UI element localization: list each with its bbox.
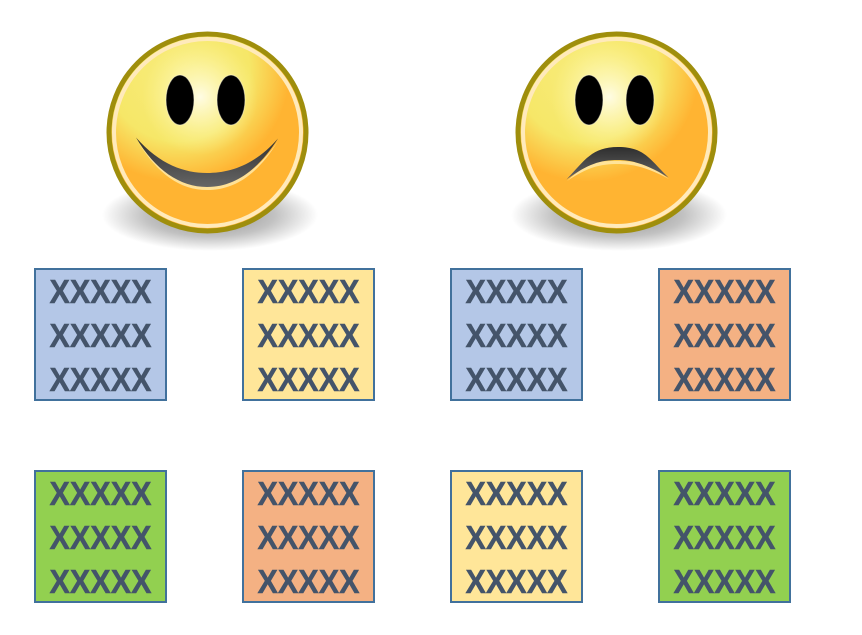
- smile highlight: [138, 141, 278, 190]
- box: row 1 column 1 blue: XXXXX: [50, 361, 152, 398]
- box: row 1 column 1 blue: XXXXX: [50, 273, 152, 310]
- face glow: [142, 39, 258, 155]
- box: row 1 column 4 orange: XXXXX: [674, 273, 776, 310]
- box: row 1 column 3 blue: [451, 269, 582, 400]
- right eye: [217, 75, 245, 125]
- right eye: [626, 75, 654, 125]
- box: row 2 column 4 green: XXXXX: [674, 563, 776, 600]
- left eye: [166, 75, 194, 125]
- box: row 2 column 2 orange: [243, 471, 374, 602]
- box: row 2 column 1 green: [35, 471, 166, 602]
- box: row 2 column 2 orange: XXXXX: [258, 475, 360, 512]
- box: row 1 column 3 blue: XXXXX: [466, 361, 568, 398]
- icon: sad face: [511, 34, 727, 251]
- face inner ring: [523, 39, 710, 226]
- box: row 1 column 4 orange: XXXXX: [674, 317, 776, 354]
- box: row 1 column 3 blue: XXXXX: [466, 317, 568, 354]
- face glow: [551, 39, 667, 155]
- box: row 2 column 3 yellow: XXXXX: [466, 475, 568, 512]
- box: row 2 column 2 orange: XXXXX: [258, 563, 360, 600]
- box: row 2 column 3 yellow: [451, 471, 582, 602]
- face shadow: [102, 179, 318, 251]
- frown: [566, 147, 668, 180]
- box: row 2 column 1 green: XXXXX: [50, 563, 152, 600]
- box: row 1 column 3 blue: XXXXX: [466, 273, 568, 310]
- box: row 1 column 1 blue: [35, 269, 166, 400]
- frown highlight: [567, 161, 669, 181]
- box: row 2 column 4 green: XXXXX: [674, 519, 776, 556]
- face inner ring: [114, 39, 301, 226]
- box: row 2 column 4 green: XXXXX: [674, 475, 776, 512]
- box: row 1 column 2 yellow: XXXXX: [258, 273, 360, 310]
- box: row 2 column 3 yellow: XXXXX: [466, 519, 568, 556]
- box: row 2 column 1 green: XXXXX: [50, 519, 152, 556]
- box: row 1 column 4 orange: [659, 269, 790, 400]
- smile: [136, 138, 278, 187]
- left eye: [575, 75, 603, 125]
- box: row 1 column 2 yellow: XXXXX: [258, 317, 360, 354]
- face disc: [109, 34, 306, 231]
- icon: happy face: [102, 34, 318, 251]
- box: row 1 column 2 yellow: XXXXX: [258, 361, 360, 398]
- face disc: [518, 34, 715, 231]
- box: row 2 column 2 orange: XXXXX: [258, 519, 360, 556]
- box: row 1 column 4 orange: XXXXX: [674, 361, 776, 398]
- box: row 2 column 4 green: [659, 471, 790, 602]
- box: row 2 column 3 yellow: XXXXX: [466, 563, 568, 600]
- face shadow: [511, 179, 727, 251]
- box: row 1 column 1 blue: XXXXX: [50, 317, 152, 354]
- box: row 1 column 2 yellow: [243, 269, 374, 400]
- box: row 2 column 1 green: XXXXX: [50, 475, 152, 512]
